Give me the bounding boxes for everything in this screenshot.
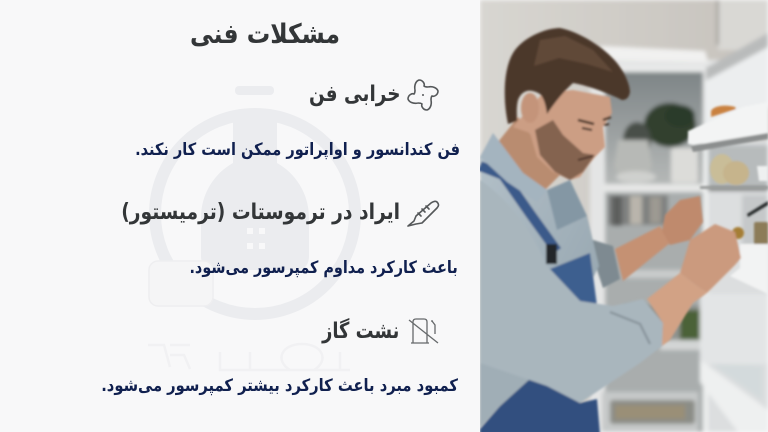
head <box>513 90 612 180</box>
sleeve, main forearm and hand <box>480 180 663 403</box>
collar <box>480 134 520 191</box>
panel: text background <box>0 0 480 432</box>
watermark: logo <box>148 86 361 320</box>
row 1 description: فن کندانسور و اواپراتور ممکن است کار نکند. <box>135 140 460 160</box>
torso and neck <box>498 117 560 190</box>
row 1 heading: خرابی فن <box>308 82 400 107</box>
door shelf, eggs, bin <box>688 102 768 145</box>
door <box>712 140 768 432</box>
row 3 description: کمبود مبرد باعث کارکرد بیشتر کمپرسور می‌شود. <box>101 376 458 396</box>
photo: technician repairing a refrigerator <box>480 0 768 432</box>
row 2 description: باعث کارکرد مداوم کمپرسور می‌شود. <box>190 258 458 278</box>
row 2 heading: ایراد در ترموستات (ترمیستور) <box>121 200 400 225</box>
apron strap and bib <box>480 166 557 251</box>
title: مشکلات فنی <box>190 19 340 50</box>
plants and bowls <box>644 103 696 147</box>
lower shelves <box>625 270 700 278</box>
row 3 heading: نشت گاز <box>322 319 399 344</box>
far forearm and sleeve <box>615 226 670 281</box>
fridge body <box>590 60 720 432</box>
